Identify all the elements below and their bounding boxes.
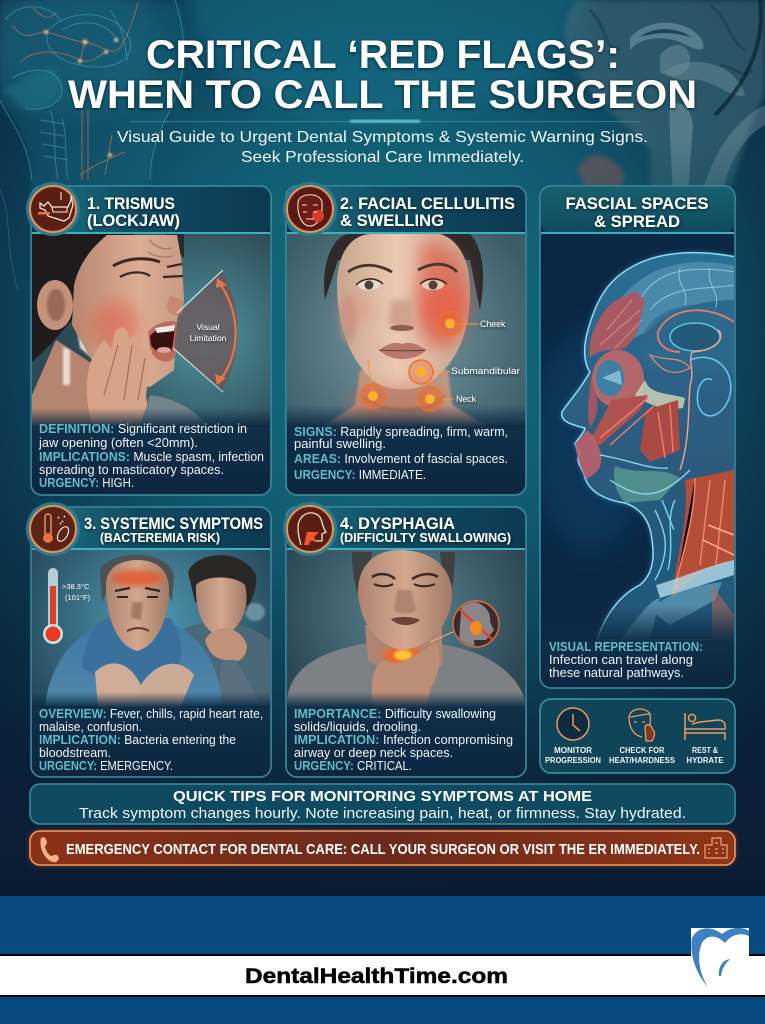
label: visual limitation: Visual — [196, 322, 220, 332]
icon: checking face — [629, 709, 655, 741]
panel heading band — [32, 187, 270, 233]
description — [294, 425, 508, 482]
panel heading band — [32, 508, 270, 549]
description: IMPLICATION: Infection compromising — [294, 733, 513, 747]
description: solids/liquids, drooling. — [294, 720, 421, 734]
description: OVERVIEW: Fever, chills, rapid heart rate, — [39, 707, 263, 721]
heading: systemic symptoms — [84, 514, 263, 545]
description — [294, 707, 513, 773]
panel: quick tips: QUICK TIPS FOR MONITORING SYMPTOMS AT HOME — [173, 788, 592, 805]
icon labels: REST & — [692, 746, 718, 755]
icon: tooth logo — [691, 928, 749, 987]
icon: bed — [685, 713, 725, 740]
heading: fascial spaces: & SPREAD — [594, 212, 680, 231]
panel: home monitoring icons — [540, 699, 735, 773]
description: painful swelling. — [294, 437, 386, 451]
panel: facial cellulitis — [283, 182, 526, 495]
heading: systemic symptoms: 3. SYSTEMIC SYMPTOMS — [84, 514, 263, 533]
markers: cheek, submandibular, neck: Neck — [456, 394, 477, 404]
icon labels: HYDRATE — [686, 756, 724, 765]
heading: trismus: (LOCKJAW) — [87, 211, 180, 230]
description: IMPLICATIONS: Muscle spasm, infection — [39, 450, 264, 464]
description: URGENCY: CRITICAL. — [294, 759, 412, 773]
description: IMPORTANCE: Difficulty swallowing — [294, 707, 496, 721]
heading: facial cellulitis: & SWELLING — [340, 211, 444, 230]
title: WHEN TO CALL THE SURGEON — [68, 73, 697, 117]
icon labels: HEAT/HARDNESS — [609, 756, 675, 765]
icon labels — [545, 746, 724, 765]
icon: throat — [283, 502, 337, 556]
description: Infection can travel along — [549, 653, 693, 667]
heading: facial cellulitis — [340, 194, 515, 230]
panel: systemic symptoms — [26, 502, 271, 777]
description: URGENCY: HIGH. — [39, 476, 134, 490]
markers: cheek, submandibular, neck — [361, 312, 520, 411]
heading: trismus — [87, 194, 180, 230]
panel: dysphagia — [283, 502, 526, 777]
illustration: swollen face — [287, 234, 525, 426]
divider and subtitle: Seek Professional Care Immediately. — [241, 149, 524, 166]
icon: thermometer and bacteria — [26, 502, 80, 556]
icon: jaw — [26, 182, 80, 236]
heading: dysphagia: (DIFFICULTY SWALLOWING) — [340, 530, 511, 545]
label: visual limitation — [190, 322, 227, 343]
description: SIGNS: Rapidly spreading, firm, warm, — [294, 425, 508, 439]
description: malaise, confusion. — [39, 720, 142, 734]
title — [68, 33, 697, 117]
description: jaw opening (often <20mm). — [38, 436, 198, 450]
icon labels: PROGRESSION — [545, 756, 601, 765]
panel heading band — [287, 187, 525, 233]
illustration: feverish men — [32, 550, 270, 707]
panel: fascial spaces — [530, 186, 736, 688]
heading: dysphagia: 4. DYSPHAGIA — [340, 514, 455, 533]
panel: quick tips — [30, 784, 735, 824]
icon labels: MONITOR — [554, 746, 592, 755]
illustration: woman in jaw pain — [32, 234, 270, 426]
icon labels: CHECK FOR — [620, 746, 665, 755]
description: IMPLICATION: Bacteria entering the — [39, 733, 236, 747]
description: URGENCY: IMMEDIATE. — [294, 468, 426, 482]
heading: dysphagia — [340, 514, 511, 545]
divider and subtitle — [117, 120, 648, 166]
heading: fascial spaces: FASCIAL SPACES — [566, 194, 708, 213]
description: these natural pathways. — [549, 666, 684, 680]
description: spreading to masticatory spaces. — [39, 463, 224, 477]
footer website: DentalHealthTime.com — [245, 965, 508, 988]
heading: systemic symptoms: (BACTEREMIA RISK) — [100, 530, 220, 545]
panel: trismus — [26, 182, 271, 495]
heading: trismus: 1. TRISMUS — [87, 194, 175, 213]
background: MRI head scan — [564, 0, 765, 188]
description: VISUAL REPRESENTATION: — [549, 640, 703, 654]
icon: face — [283, 182, 337, 236]
panel heading band — [541, 187, 734, 233]
footer band — [0, 896, 765, 1024]
icon: hospital — [705, 838, 727, 858]
title: CRITICAL ‘RED FLAGS’: — [146, 33, 620, 77]
panel heading band — [287, 508, 525, 549]
label: visual limitation: Limitation — [190, 333, 227, 343]
description: URGENCY: EMERGENCY. — [39, 759, 173, 773]
description — [549, 640, 703, 680]
markers: cheek, submandibular, neck: Submandibular — [451, 366, 520, 376]
heading: fascial spaces — [566, 194, 708, 231]
icon: phone — [40, 837, 59, 862]
thermometer: (101°F) — [65, 593, 91, 602]
thermometer — [43, 568, 91, 644]
divider and subtitle: Visual Guide to Urgent Dental Symptoms & Systemic Warning Signs. — [117, 129, 648, 146]
description: DEFINITION: Significant restriction in — [39, 422, 247, 436]
description: bloodstream. — [39, 746, 111, 760]
callout: emergency contact — [30, 831, 735, 865]
thermometer: >38.3°C — [62, 582, 90, 591]
markers: cheek, submandibular, neck: Cheek — [480, 319, 506, 329]
heading: facial cellulitis: 2. FACIAL CELLULITIS — [340, 194, 515, 213]
description: airway or deep neck spaces. — [294, 746, 453, 760]
icon: clock — [557, 708, 589, 740]
description — [39, 707, 263, 773]
illustration: man holding throat — [287, 550, 525, 707]
description: AREAS: Involvement of fascial spaces. — [294, 452, 508, 466]
illustration: head anatomy — [541, 250, 734, 640]
panel: quick tips: Track symptom changes hourly. Note increasing pain, heat, or firmness. Stay hydrated. — [79, 806, 686, 822]
description — [38, 422, 264, 490]
inset: throat detail — [430, 600, 500, 648]
background: glowing head anatomy — [0, 0, 186, 290]
